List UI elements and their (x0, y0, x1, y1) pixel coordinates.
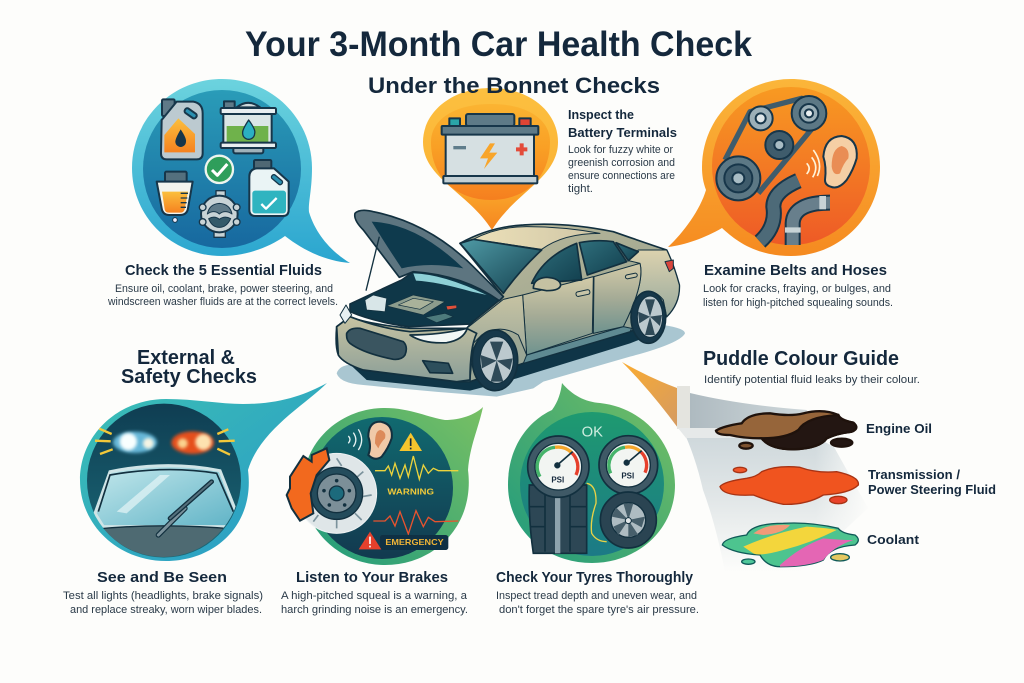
icon: pulleys (716, 96, 826, 200)
puddle: coolant (722, 523, 858, 567)
text: puddle intro: Identify potential fluid leaks by their colour. (704, 374, 920, 386)
icon: warning triangle (399, 433, 422, 451)
inner circle: brakes (311, 417, 453, 559)
text: battery description: tight. (568, 183, 593, 195)
exclamation mark: warning (408, 438, 413, 449)
label: engine oil: Engine Oil (866, 421, 932, 436)
label: emergency (380, 535, 448, 550)
text: brakes description: harch grinding noise is an emergency. (281, 604, 468, 616)
bonnet prop rod (366, 237, 379, 291)
car dark under-shadow (351, 313, 665, 391)
chart: emergency sound wave (373, 511, 458, 534)
heading: inspect the battery terminals: Battery Terminals (568, 126, 677, 140)
wedge: orange bubble tail (622, 362, 690, 428)
label: warning: WARNING (387, 487, 434, 497)
headlight (410, 328, 467, 343)
panel: lights and wipers (80, 383, 327, 561)
heading: inspect the battery terminals: Inspect the (568, 108, 634, 122)
front fender (457, 295, 527, 382)
speech bubble: brakes (303, 407, 483, 565)
illustration: car with open bonnet (336, 210, 685, 397)
icon: hoses (760, 181, 830, 245)
icon: car battery (442, 114, 538, 183)
heading: external and safety checks: External & (137, 347, 235, 369)
speech bubble: fluids (132, 79, 350, 263)
exclamation mark: emergency (367, 537, 372, 547)
text: belts description: Look for cracks, fraying, or bulges, and (703, 283, 891, 295)
icon: white headlights (113, 432, 157, 453)
icon: belt (725, 98, 823, 193)
heading: puddle colour guide: Puddle Colour Guide (703, 348, 899, 370)
text: tyres description: don't forget the spare tyre's air pressure. (499, 604, 699, 616)
icon: tyre gauges and wheel (528, 425, 658, 553)
wedge: driveway concrete (682, 428, 868, 572)
text: lights description: Test all lights (headlights, brake signals) (63, 590, 263, 602)
icon: washer fluid jug (249, 160, 289, 216)
windscreen (95, 466, 237, 527)
inner circle: battery (431, 104, 550, 200)
driveway right-hand fade (815, 440, 871, 575)
icon: spare tyre (600, 492, 656, 548)
windscreen streaks (117, 475, 170, 513)
tread grooves (530, 487, 586, 552)
text: battery description: greenish corrosion and (568, 157, 675, 169)
icon: amber brake lights (171, 431, 214, 454)
heading: examine belts and hoses: Examine Belts and Hoses (704, 262, 887, 279)
rear wheel (631, 291, 666, 343)
text: fluids description: windscreen washer fluids are at the correct levels. (107, 296, 338, 308)
icon: wiper blade (158, 482, 212, 535)
label: transmission and power steering fluid: Transmission / (868, 467, 960, 482)
panel: puddle colour guide (622, 362, 996, 575)
heading: see and be seen: See and Be Seen (97, 569, 227, 586)
icon: light rays (95, 429, 235, 455)
title: Your 3-Month Car Health Check (245, 24, 752, 64)
icon: brake disc (297, 453, 377, 533)
rear door panel (593, 263, 641, 333)
text: tyres description: Inspect tread depth and uneven wear, and (496, 590, 697, 602)
inner circle: tyres (520, 412, 664, 556)
icon: emergency triangle (359, 532, 381, 549)
puddle: transmission / power steering fluid (720, 467, 858, 504)
icon: ear with sound waves (348, 422, 392, 459)
text: brakes description: A high-pitched squeal is a warning, a (281, 590, 468, 602)
side windows (532, 241, 638, 283)
exposed windscreen under bonnet (413, 273, 487, 295)
windscreen (460, 239, 542, 293)
icon: power steering wheel (199, 191, 240, 237)
wing mirror (533, 277, 561, 291)
car body (336, 224, 679, 382)
speech bubble: belts (668, 79, 880, 256)
icon: car lights and wiper (87, 404, 243, 560)
text: lights description: and replace streaky, worn wiper blades. (70, 604, 262, 616)
car roof (473, 227, 600, 249)
front bumper (337, 317, 477, 382)
rear quarter panel (623, 250, 679, 327)
engine bay (350, 272, 502, 327)
icon: gauge 2: PSI (621, 471, 634, 480)
icon: belts, pulleys, hoses and ear (716, 96, 857, 245)
door handles (576, 289, 590, 297)
puddle: engine oil (716, 411, 856, 449)
panel: belts and hoses (668, 79, 880, 256)
label: transmission and power steering fluid: Power Steering Fluid (868, 482, 996, 497)
heading: check your tyres thoroughly: Check Your Tyres Thoroughly (496, 569, 694, 586)
front wheel (472, 330, 518, 391)
heading: external and safety checks: Safety Checks (121, 366, 257, 388)
heading: check the 5 essential fluids: Check the 5 Essential Fluids (125, 262, 322, 279)
panel: battery (423, 88, 558, 230)
car ground shadow (337, 325, 685, 397)
text: fluids description: Ensure oil, coolant, brake, power steering, and (115, 283, 333, 295)
heading: listen to your brakes: Listen to Your Brakes (296, 569, 448, 586)
icon: coolant radiator (221, 101, 276, 153)
icon: check mark (206, 156, 233, 183)
headlight left (340, 305, 352, 323)
icon: oil jug (161, 99, 203, 159)
sill (523, 327, 632, 363)
icon: ear (823, 136, 857, 187)
text: battery description: ensure connections are (568, 170, 675, 182)
icon group: fluid containers (157, 99, 289, 237)
panel: fluids (132, 79, 350, 263)
front door panel (523, 277, 593, 355)
icon: tyre tread (529, 485, 587, 553)
panel: brakes (287, 407, 483, 565)
label: OK: OK (582, 425, 603, 441)
speech bubble: lights (80, 383, 327, 561)
icon: gauge 1: PSI (551, 476, 564, 485)
front grille (347, 328, 406, 359)
label: coolant: Coolant (867, 532, 920, 547)
text: belts description: listen for high-pitched squealing sounds. (703, 297, 893, 309)
text: battery description: Look for fuzzy white or (568, 144, 673, 156)
kerb (678, 428, 812, 438)
icon: brake fluid reservoir (157, 172, 193, 222)
inner circle: fluids (143, 90, 301, 248)
fog lamp (423, 361, 453, 373)
inner circle: belts (712, 87, 870, 245)
inner circle: night sky (87, 404, 241, 558)
icon: brake caliper (287, 448, 329, 521)
puddles drawn in zoomed coordinates (716, 411, 858, 567)
open bonnet (355, 210, 503, 301)
panel: tyres (508, 383, 675, 563)
bonnet underside (372, 222, 463, 268)
speech bubble: battery (423, 88, 558, 230)
engine parts (365, 295, 457, 323)
heading: under the bonnet checks: Under the Bonnet Checks (368, 73, 660, 98)
icon: brake assembly (287, 422, 458, 550)
label: emergency: EMERGENCY (385, 537, 444, 547)
chart: warning sound wave (375, 456, 458, 479)
bonnet edge (103, 525, 224, 557)
speech bubble: tyres (508, 383, 675, 563)
garage wall post (677, 386, 690, 429)
icon: air hose (587, 483, 607, 542)
tail light (665, 260, 673, 272)
garage wall (690, 393, 807, 428)
